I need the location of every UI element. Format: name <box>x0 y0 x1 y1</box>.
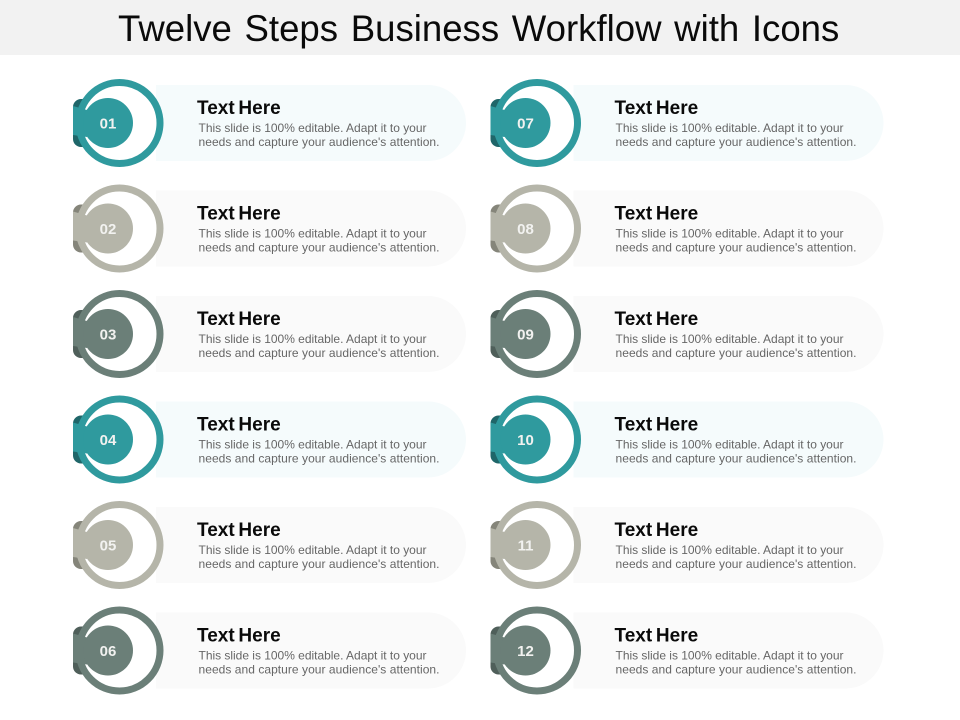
step 10 <box>490 399 884 480</box>
step 05: needs and capture your audience's attention. <box>198 557 440 571</box>
step 07: This slide is 100% editable. Adapt it to your <box>616 121 844 135</box>
step 02: This slide is 100% editable. Adapt it to your <box>198 226 426 240</box>
step 08: Text Here <box>614 204 698 224</box>
step 09: Text Here <box>614 309 698 330</box>
step 07: needs and capture your audience's attention. <box>616 135 856 149</box>
step 01: Text Here <box>197 98 281 119</box>
step 01: This slide is 100% editable. Adapt it to your <box>198 121 426 135</box>
step 04: 04 <box>100 432 117 449</box>
step 10: This slide is 100% editable. Adapt it to your <box>616 438 844 452</box>
step 08: 08 <box>517 221 534 238</box>
step 09: 09 <box>517 326 534 344</box>
step 12: needs and capture your audience's attention. <box>616 662 856 676</box>
step 03: 03 <box>100 326 116 344</box>
step 12: 12 <box>517 643 534 660</box>
step 12: This slide is 100% editable. Adapt it to your <box>616 648 844 662</box>
step 10: 10 <box>517 432 534 449</box>
title banner: Twelve Steps Business Workflow with Icons <box>118 8 839 49</box>
step 04: Text Here <box>197 414 281 436</box>
step 02: 02 <box>100 221 116 238</box>
step 02: Text Here <box>197 204 281 224</box>
step 11: 11 <box>518 538 533 554</box>
step 07: 07 <box>517 116 534 132</box>
step 03: needs and capture your audience's attention. <box>198 346 440 360</box>
step 07 <box>490 82 884 164</box>
step 11: needs and capture your audience's attention. <box>616 557 856 571</box>
step 08: This slide is 100% editable. Adapt it to your <box>616 226 844 240</box>
step 12 <box>490 610 884 691</box>
step 04: This slide is 100% editable. Adapt it to your <box>198 438 426 452</box>
step 06: This slide is 100% editable. Adapt it to your <box>198 648 426 662</box>
step 09: This slide is 100% editable. Adapt it to your <box>616 332 844 346</box>
step 05 <box>73 504 466 586</box>
step 04: needs and capture your audience's attention. <box>198 452 440 466</box>
step 10: needs and capture your audience's attention. <box>616 452 856 466</box>
step 11: This slide is 100% editable. Adapt it to your <box>616 543 844 557</box>
step 01 <box>73 82 466 164</box>
step 06: needs and capture your audience's attention. <box>198 662 440 676</box>
step 12: Text Here <box>614 626 698 646</box>
step 05: This slide is 100% editable. Adapt it to your <box>198 543 426 557</box>
step 09 <box>490 294 884 374</box>
step 10: Text Here <box>614 414 698 436</box>
step 11: Text Here <box>614 520 698 541</box>
step 08: needs and capture your audience's attention. <box>616 240 856 254</box>
step 09: needs and capture your audience's attention. <box>616 346 856 360</box>
step 07: Text Here <box>614 98 698 119</box>
step 02: needs and capture your audience's attention. <box>198 240 440 254</box>
step 01: 01 <box>100 116 116 132</box>
step 04 <box>73 399 466 480</box>
step 01: needs and capture your audience's attention. <box>198 135 440 149</box>
step 08 <box>490 188 884 269</box>
step 03 <box>73 294 466 374</box>
step 06: 06 <box>100 643 116 660</box>
step 11 <box>490 504 884 586</box>
step 02 <box>73 188 466 269</box>
step 06 <box>73 610 466 691</box>
step 05: 05 <box>100 538 116 554</box>
step 05: Text Here <box>197 520 281 541</box>
step 03: This slide is 100% editable. Adapt it to your <box>198 332 426 346</box>
title banner <box>0 0 960 55</box>
step 03: Text Here <box>197 309 281 330</box>
step 06: Text Here <box>197 626 281 646</box>
